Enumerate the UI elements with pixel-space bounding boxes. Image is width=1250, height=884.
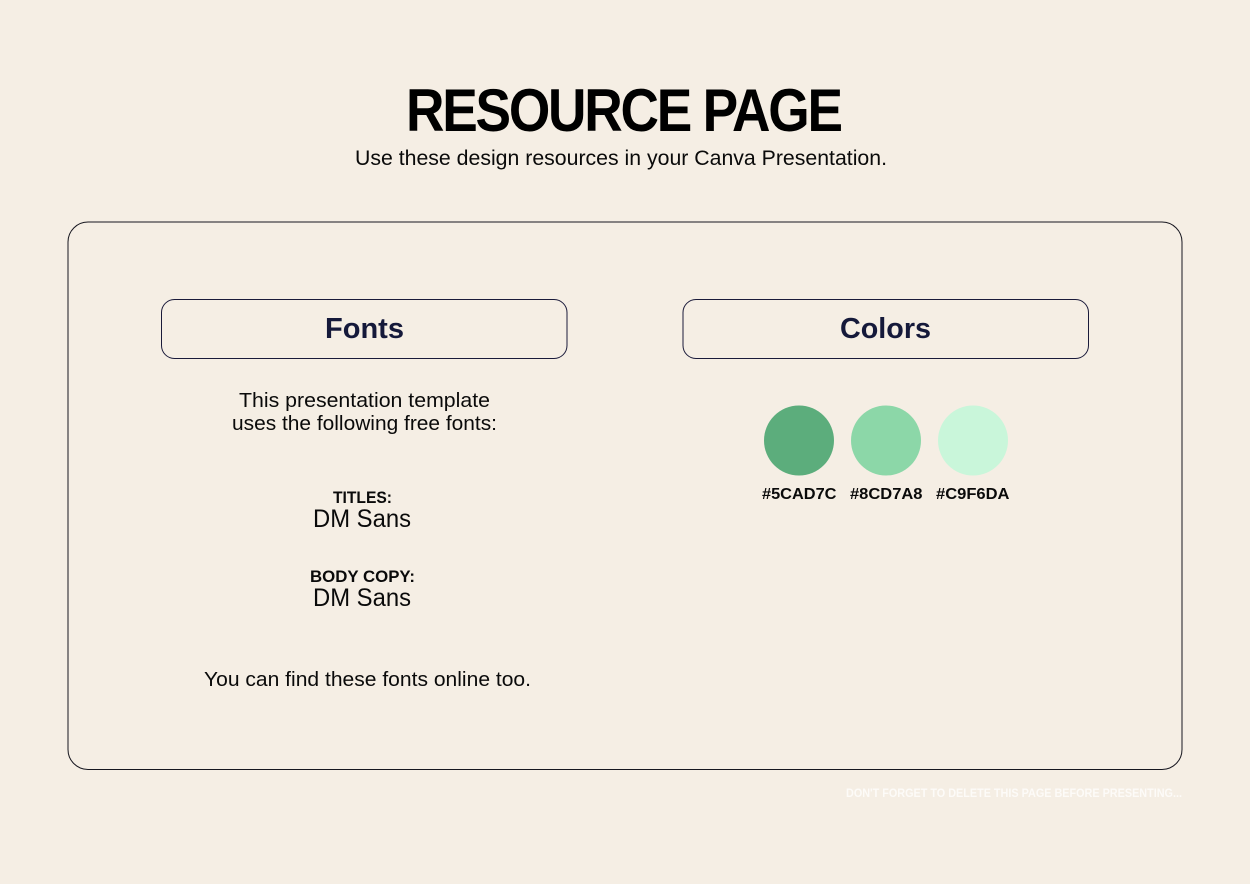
title: RESOURCE PAGE bbox=[406, 78, 841, 145]
text block: titles font bbox=[313, 488, 411, 533]
heading: fonts bbox=[162, 300, 567, 358]
panel: colors bbox=[683, 300, 1088, 503]
subtitle: Use these design resources in your Canva Presentation. bbox=[355, 147, 887, 170]
heading: fonts: Fonts bbox=[325, 313, 404, 345]
text block: body copy font: BODY COPY: bbox=[310, 567, 415, 586]
text block: fonts intro: uses the following free fonts: bbox=[232, 412, 497, 435]
swatch: C9F6DA: #C9F6DA bbox=[936, 486, 1010, 503]
text block: body copy font bbox=[310, 567, 415, 612]
swatch: 8CD7A8: #8CD7A8 bbox=[850, 486, 923, 503]
text block: fonts note: You can find these fonts online too. bbox=[204, 668, 531, 691]
panel: main resource frame bbox=[68, 222, 1182, 770]
text block: fonts intro: This presentation template bbox=[239, 389, 490, 412]
text block: body copy font: DM Sans bbox=[313, 584, 411, 612]
text block: titles font: TITLES: bbox=[333, 488, 392, 507]
heading: colors: Colors bbox=[840, 313, 931, 345]
heading: colors bbox=[683, 300, 1088, 358]
swatch: 8CD7A8 bbox=[850, 406, 923, 503]
text block: fonts intro bbox=[232, 389, 497, 435]
swatch: 5CAD7C bbox=[762, 406, 837, 503]
text block: titles font: DM Sans bbox=[313, 505, 411, 533]
footer note: DON'T FORGET TO DELETE THIS PAGE BEFORE PRESENTING... bbox=[846, 786, 1182, 800]
swatch: 5CAD7C: #5CAD7C bbox=[762, 486, 837, 503]
panel: fonts bbox=[162, 300, 567, 691]
swatch: C9F6DA bbox=[936, 406, 1010, 503]
